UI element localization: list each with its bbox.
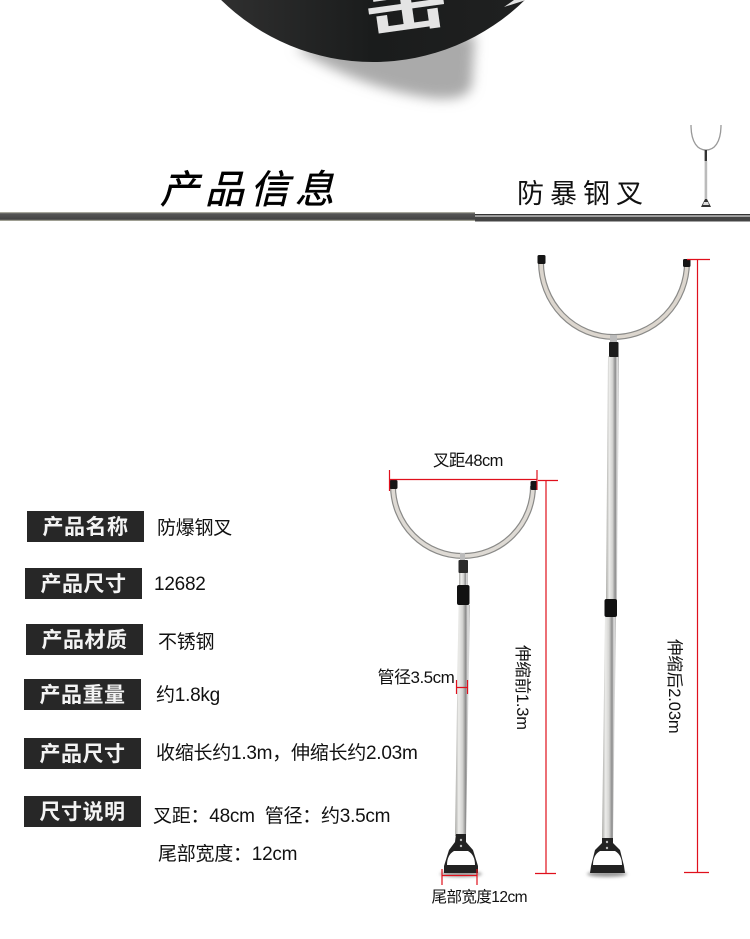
black ball with shadow bbox=[221, 0, 525, 106]
label: product name bbox=[27, 511, 144, 542]
subtitle: riot steel fork: 防暴钢叉 bbox=[517, 179, 649, 209]
dimension label: fork width: 叉距48cm bbox=[433, 452, 503, 470]
dimension label: tail width: 尾部宽度12cm bbox=[432, 888, 527, 906]
label: weight: 产品重量 bbox=[40, 684, 126, 707]
dimension label: tube diameter: 管径3.5cm bbox=[378, 668, 455, 687]
red dimension lines bbox=[389, 260, 710, 885]
tail handle bbox=[440, 834, 482, 877]
dimension label: after extension: 伸缩后2.03m bbox=[665, 639, 684, 734]
label: dimensions bbox=[24, 738, 141, 769]
value: material: 不锈钢 bbox=[158, 632, 214, 653]
value: weight: 约1.8kg bbox=[156, 685, 220, 706]
right fork: extended bbox=[538, 255, 690, 877]
header divider bars bbox=[0, 212, 750, 222]
value: fork width and tube diameter: 叉距：48cm 管径：约3.5cm bbox=[153, 806, 390, 827]
label: dimensions: 产品尺寸 bbox=[40, 743, 126, 766]
title: product information: 产品信息 bbox=[160, 169, 340, 212]
value: dimensions: 收缩长约1.3m，伸缩长约2.03m bbox=[156, 743, 418, 764]
value: tail width: 尾部宽度：12cm bbox=[158, 844, 297, 865]
label: product size: 产品尺寸 bbox=[40, 573, 126, 596]
fork tips bbox=[390, 480, 538, 490]
value: model number: 12682 bbox=[154, 574, 206, 595]
fork arc bbox=[541, 262, 687, 337]
label: size notes bbox=[24, 796, 141, 827]
label: size notes: 尺寸说明 bbox=[40, 801, 126, 824]
left fork: retracted bbox=[390, 480, 538, 877]
value: product name: 防爆钢叉 bbox=[157, 518, 232, 539]
tail handle bbox=[587, 838, 627, 877]
dimension label: before extension: 伸缩前1.3m bbox=[513, 645, 532, 730]
label: product size bbox=[25, 568, 142, 599]
fork arc bbox=[393, 486, 533, 556]
label: material bbox=[26, 624, 143, 655]
small product icon bbox=[691, 125, 721, 207]
fork tips bbox=[538, 255, 690, 267]
label: product name: 产品名称 bbox=[42, 516, 128, 539]
telescopic shaft bbox=[455, 553, 470, 836]
label: material: 产品材质 bbox=[42, 629, 128, 652]
telescopic shaft bbox=[602, 335, 619, 839]
label: weight bbox=[24, 679, 141, 710]
